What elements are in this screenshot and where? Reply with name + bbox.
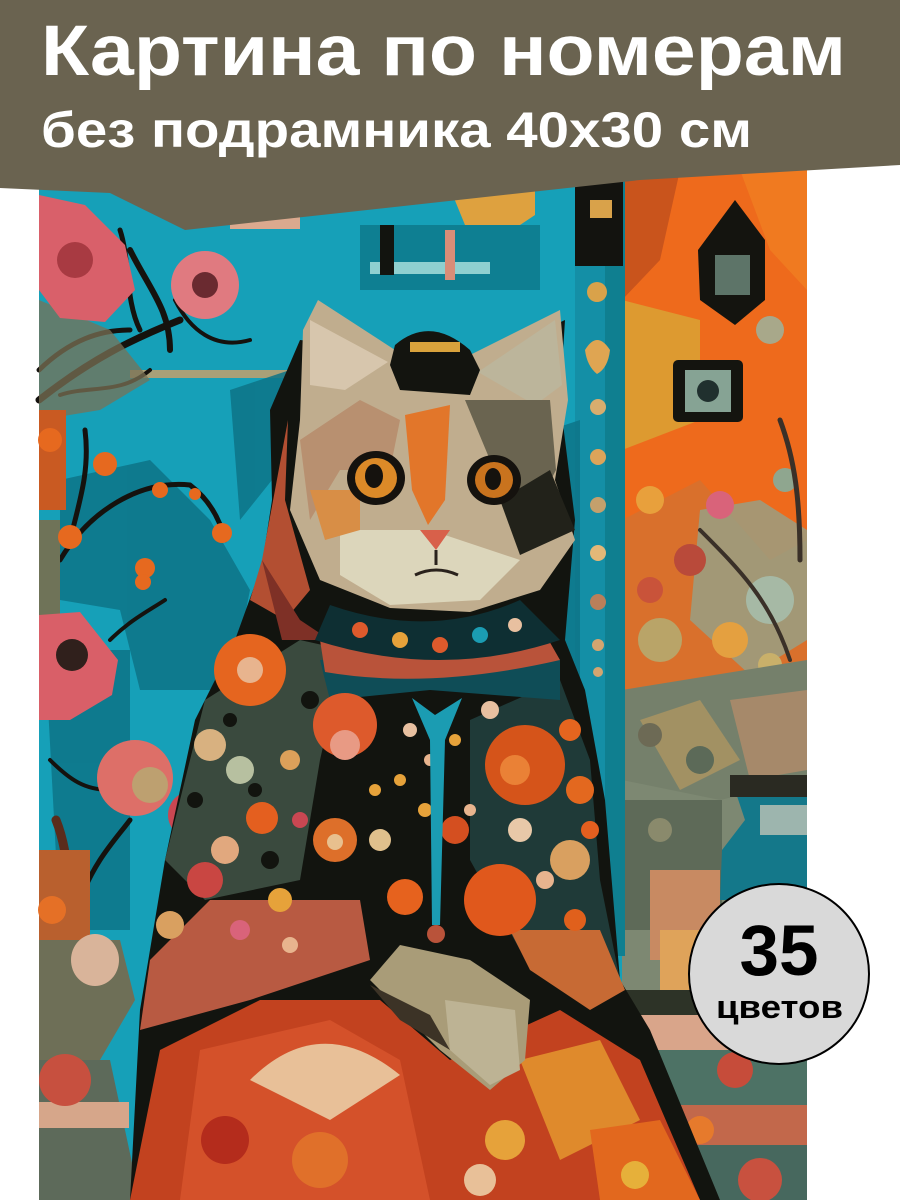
painting: vertical teal band with dots [575,176,625,956]
title: Картина по номерам [41,12,846,91]
subtitle: без подрамника 40х30 см [41,102,752,158]
painting: orange wall at right [622,170,807,700]
painting: robe centre seam [412,698,462,943]
painting: robe flowers [156,634,599,953]
badge: 35 colours: цветов [716,989,843,1025]
painting: pink flowers [39,195,239,839]
painting: headscarf and body silhouette [130,320,720,1200]
header banner [0,0,900,230]
painting: red skirt [130,1000,700,1200]
painting: cat neck collar [315,600,560,660]
painting: lantern [698,200,765,325]
painting: lower right grey wall and vase [622,660,807,1200]
painting: left dark patches [38,300,150,1200]
painting: orange buds on branches [38,428,232,590]
painting: cat in floral robe [38,170,807,1200]
painting: cherry blossom branches [39,230,800,1200]
painting: cat head [290,300,575,612]
painting: cat eyes and nose [347,451,521,575]
painting: dark teal shading on the wall [45,370,580,930]
painting: square wall ornament [673,360,743,422]
badge: 35 colours [689,884,869,1064]
badge: 35 colours: 35 [740,912,818,991]
painting: top ornaments [130,176,623,378]
painting: cat paws [370,945,530,1090]
painting: robe colour masses [140,625,625,1030]
